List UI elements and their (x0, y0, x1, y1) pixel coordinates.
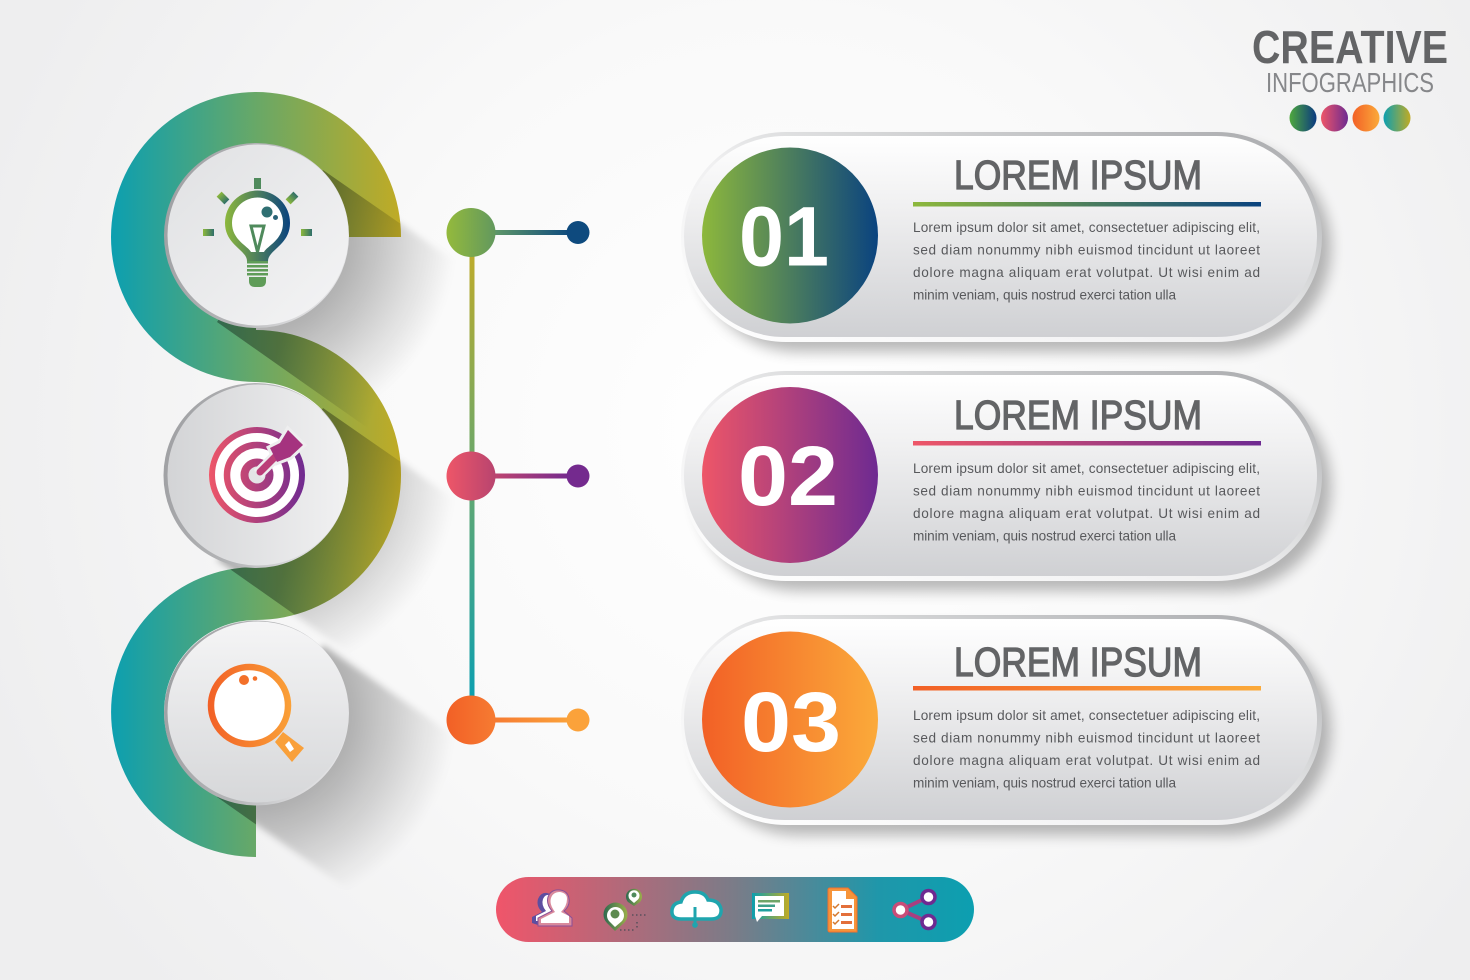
branch 3 (446, 696, 590, 744)
vertical connector line (470, 232, 474, 720)
body text: Lorem ipsum dolor sit amet, consectetuer adipiscing elit, (913, 461, 1260, 476)
heading rule (913, 441, 1261, 446)
body text: dolore magna aliquam erat volutpat. Ut wisi enim ad (913, 753, 1260, 768)
body text: minim veniam, quis nostrud exerci tation ulla (913, 288, 1176, 302)
body text: dolore magna aliquam erat volutpat. Ut wisi enim ad (913, 506, 1260, 521)
icon: checklist document (828, 888, 857, 932)
heading: LOREM IPSUM (954, 392, 1202, 438)
step circle: search (164, 620, 349, 806)
connector timeline (446, 208, 590, 744)
long shadows on background (217, 170, 539, 949)
heading: LOREM IPSUM (954, 639, 1202, 685)
panel: step 01 (681, 132, 1331, 352)
step circle: target (164, 383, 348, 568)
body text: Lorem ipsum dolor sit amet, consectetuer adipiscing elit, (913, 708, 1260, 723)
number badge 03: 03 (741, 675, 841, 769)
body text: sed diam nonummy nibh euismod tincidunt ut laoreet (913, 484, 1260, 498)
panel: step 02 (681, 371, 1331, 591)
heading: LOREM IPSUM (954, 152, 1202, 198)
branch 2 (446, 452, 590, 500)
body text: sed diam nonummy nibh euismod tincidunt ut laoreet (913, 730, 1260, 746)
number badge 01 (702, 148, 878, 324)
branch 1 (446, 208, 590, 257)
brand colour dots (1290, 104, 1410, 132)
icon: light bulb (203, 178, 312, 287)
heading rule (913, 202, 1261, 206)
number badge 03 (702, 632, 878, 808)
panel: step 03 (681, 615, 1331, 835)
bottom icon bar (496, 877, 974, 942)
body text: minim veniam, quis nostrud exerci tation ulla (913, 776, 1176, 790)
number badge 01: 01 (739, 190, 829, 284)
icon: cloud (672, 892, 721, 928)
number badge 02: 02 (738, 429, 838, 523)
body text: dolore magna aliquam erat volutpat. Ut wisi enim ad (913, 265, 1260, 280)
body text (913, 461, 1260, 544)
step circle: idea (164, 143, 349, 328)
icon: map pins (604, 889, 646, 931)
number badge 02 (702, 387, 878, 563)
body text: Lorem ipsum dolor sit amet, consectetuer adipiscing elit, (913, 220, 1260, 235)
icon: share network (894, 890, 935, 928)
S-shaped gradient ribbon (111, 92, 401, 857)
body text: minim veniam, quis nostrud exerci tation ulla (913, 528, 1176, 544)
icon: people (532, 890, 572, 926)
icon: chat bubble (752, 893, 789, 922)
brand block (1252, 21, 1448, 132)
icon: target with arrow (209, 427, 305, 523)
icon: magnifying glass (211, 667, 304, 762)
body text (913, 708, 1260, 790)
long shadows on ribbon (217, 170, 401, 824)
body text (913, 220, 1260, 302)
heading rule (913, 686, 1261, 690)
body text: sed diam nonummy nibh euismod tincidunt ut laoreet (913, 242, 1260, 258)
